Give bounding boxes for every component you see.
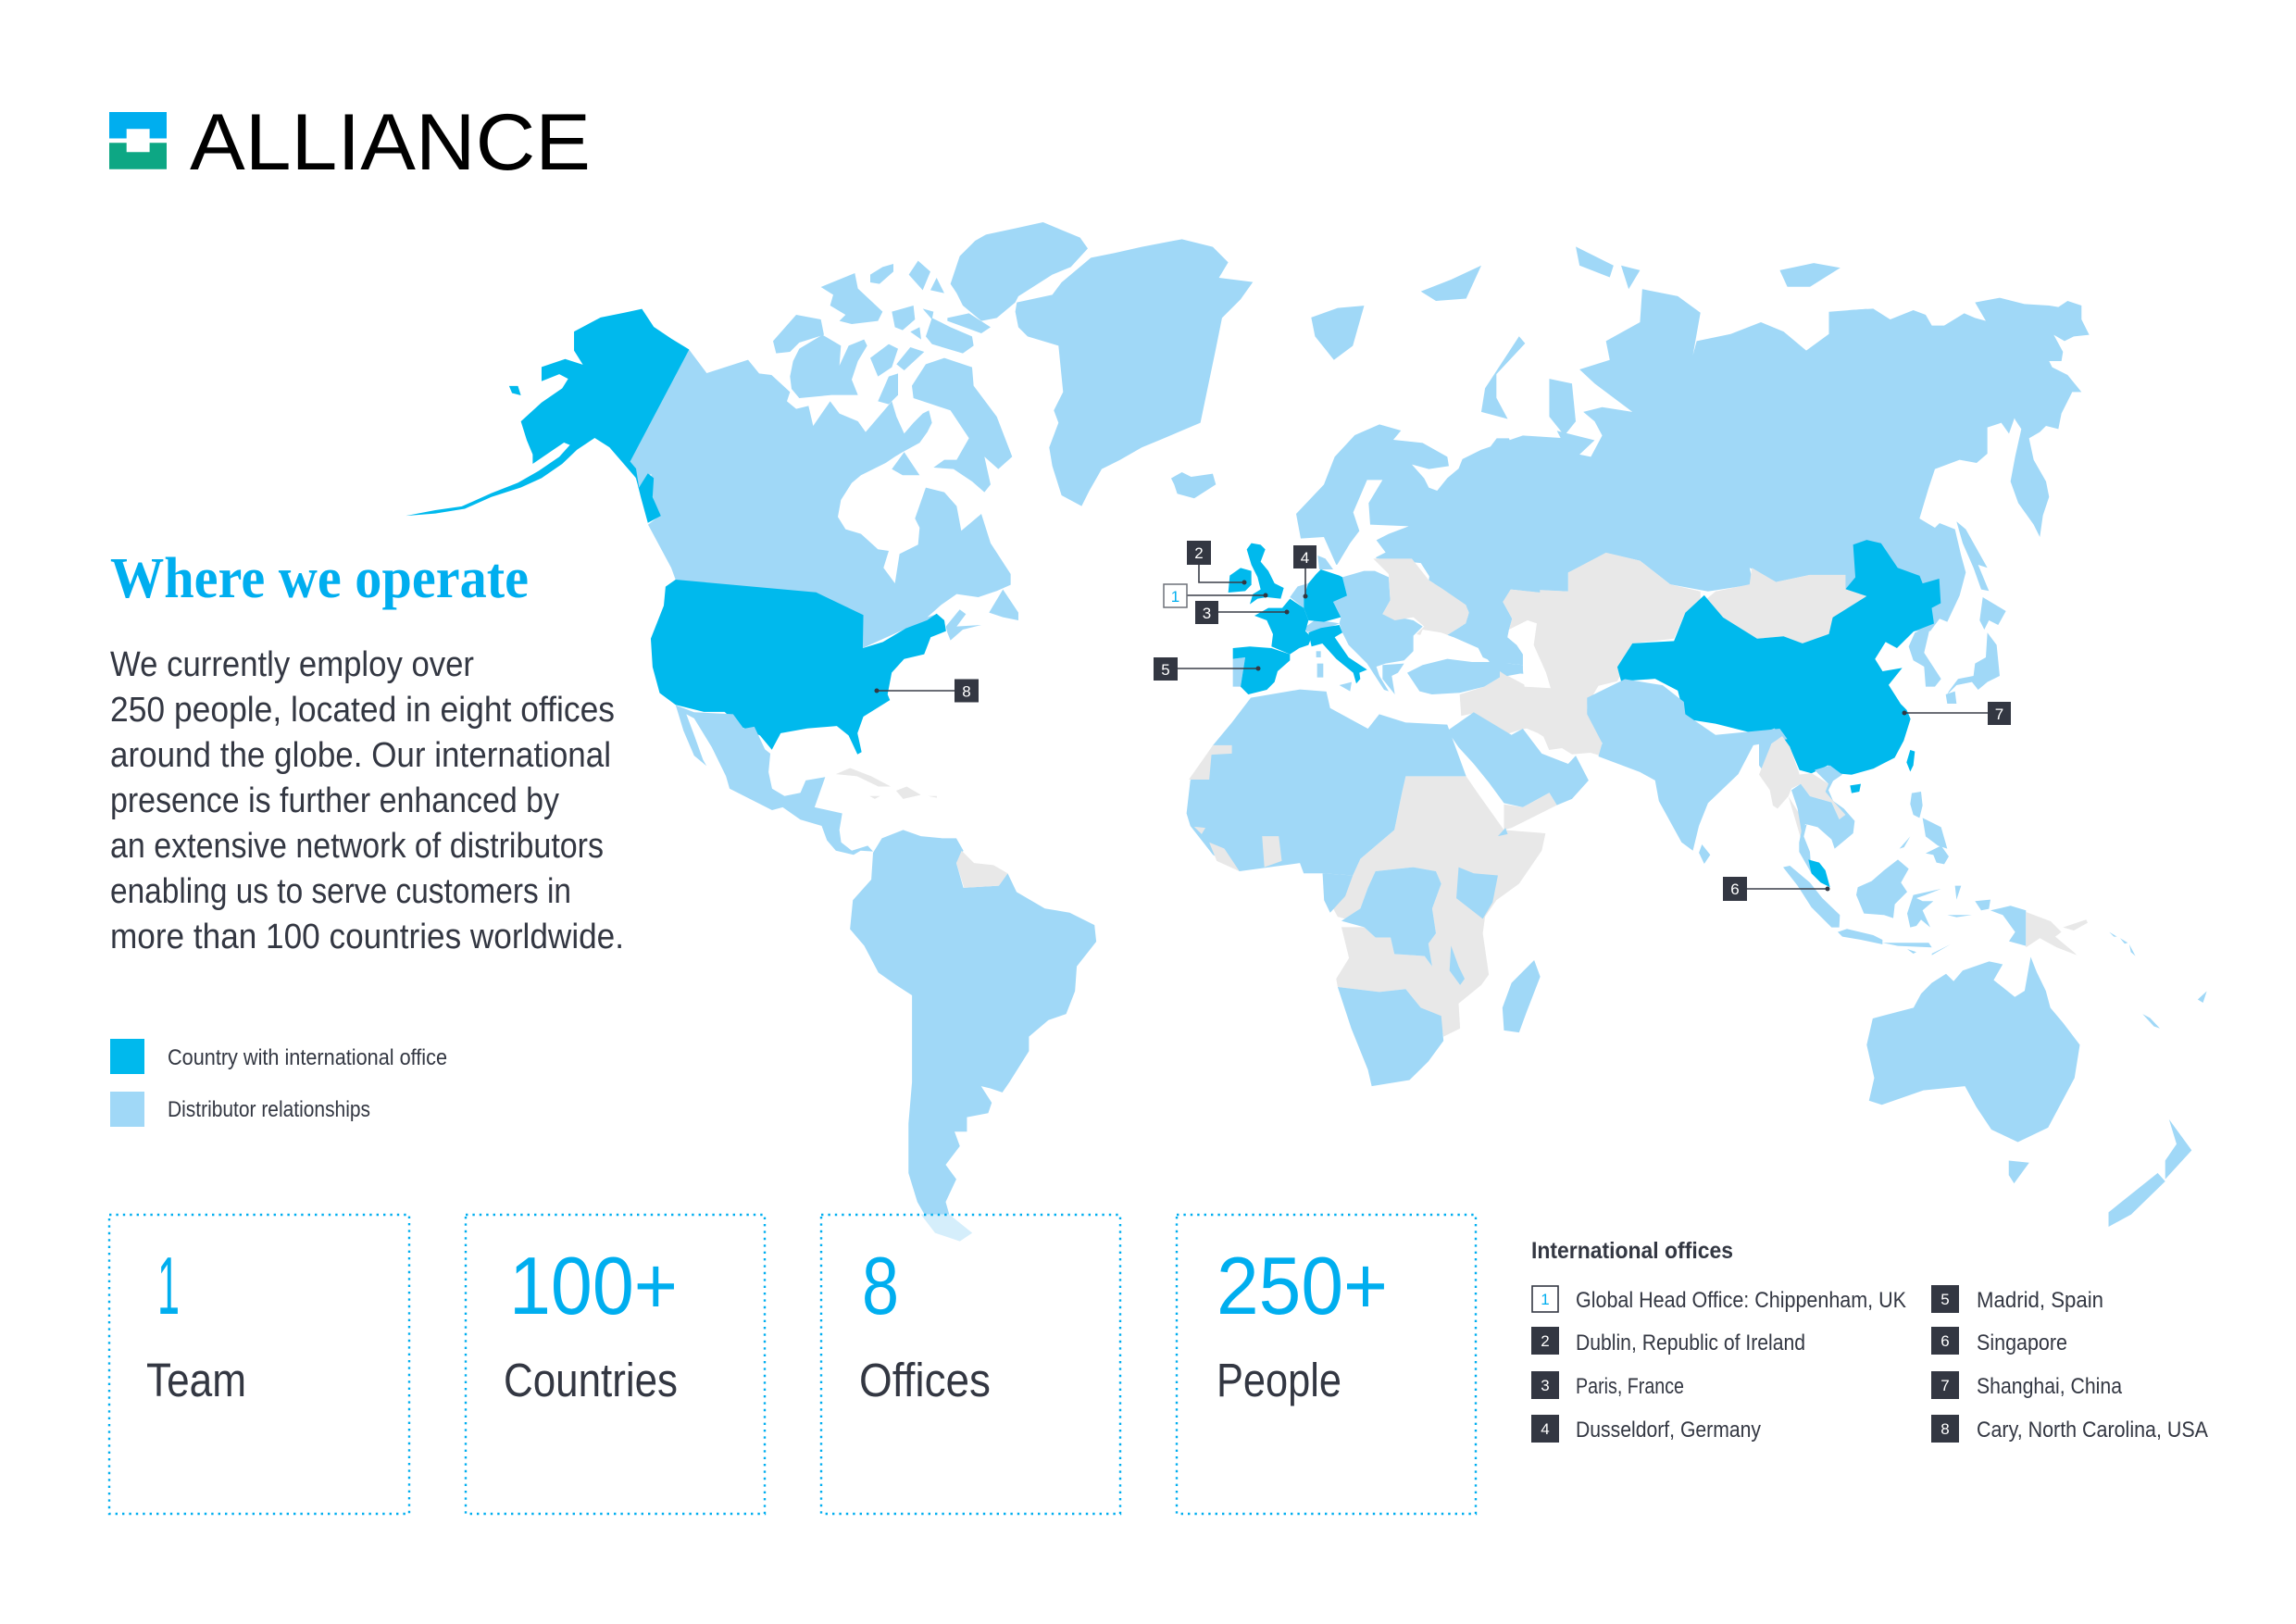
stat panel: 100+ Countries <box>466 1215 765 1514</box>
stat panel: 250+ People: People <box>1217 1354 1341 1406</box>
office rows: 2 <box>1541 1332 1550 1350</box>
office rows: 7 <box>1940 1377 1950 1394</box>
stat panel: 1 Team: 1 <box>157 1240 180 1331</box>
callout 6: Singapore <box>1723 877 1829 901</box>
office rows: 4 <box>1541 1420 1550 1438</box>
office rows: Madrid, Spain <box>1977 1288 2103 1313</box>
stat panel: 250+ People: 250+ <box>1217 1240 1388 1331</box>
map legend <box>110 1039 447 1127</box>
stat panel: 8 Offices: Offices <box>859 1354 991 1406</box>
map: Europe and Near East <box>1229 424 1602 756</box>
callout 1: Chippenham <box>1164 584 1268 607</box>
callout 7: Shanghai: 7 <box>1995 706 2003 723</box>
world map <box>406 222 2207 1242</box>
stat panel: 100+ Countries: Countries <box>504 1354 678 1406</box>
office rows <box>1531 1285 2208 1443</box>
office rows: Dusseldorf, Germany <box>1576 1418 1761 1443</box>
callout 3: Paris <box>1195 601 1289 624</box>
office rows: Shanghai, China <box>1977 1374 2123 1399</box>
office rows: 3 <box>1541 1377 1550 1394</box>
office rows: Dublin, Republic of Ireland <box>1576 1330 1805 1355</box>
callout 3: Paris: 3 <box>1203 605 1211 622</box>
office rows: 5 <box>1940 1291 1950 1308</box>
map: Alaska and USA <box>406 309 946 755</box>
stat panel: 8 Offices: 8 <box>862 1240 899 1331</box>
office rows: 8 <box>1940 1420 1950 1438</box>
map: Africa, Arabia, India and Oceania <box>1187 679 2207 1227</box>
callout 4: Dusseldorf: 4 <box>1301 549 1309 567</box>
office rows: 6 <box>1940 1332 1950 1350</box>
map: Russian Far East <box>1849 298 2090 631</box>
body text: more than 100 countries worldwide. <box>110 918 624 956</box>
stat panel: 100+ Countries: 100+ <box>509 1240 678 1331</box>
body text <box>110 645 624 956</box>
body text: enabling us to serve customers in <box>110 872 571 911</box>
stat panel: 1 Team: Team <box>146 1354 246 1406</box>
stat panel: 1 Team <box>109 1215 409 1514</box>
map legend: Country with international office <box>168 1045 447 1070</box>
body text: around the globe. Our international <box>110 736 611 775</box>
callout 1: Chippenham: 1 <box>1171 588 1179 606</box>
body text: an extensive network of distributors <box>110 827 604 866</box>
body text: We currently employ over <box>110 645 474 684</box>
map: Japan, Korea and Sakhalin <box>1909 521 2006 704</box>
logo mark <box>109 112 167 169</box>
office rows: Cary, North Carolina, USA <box>1977 1418 2208 1443</box>
callout 5: Madrid <box>1154 657 1261 681</box>
office rows: 1 <box>1541 1291 1550 1308</box>
stat panel: 250+ People <box>1177 1215 1476 1514</box>
list heading: International offices <box>1531 1238 1733 1264</box>
callout 2: Dublin: 2 <box>1194 544 1204 562</box>
callout 6: Singapore: 6 <box>1730 881 1740 898</box>
map: Central and South America <box>676 706 1096 1242</box>
callout 4: Dusseldorf <box>1293 545 1316 598</box>
callout 8: Cary <box>874 680 979 702</box>
stat panel: 8 Offices <box>821 1215 1120 1514</box>
office rows: Global Head Office: Chippenham, UK <box>1576 1288 1906 1313</box>
logo: Alliance <box>109 98 591 187</box>
map: Eurasia <box>1311 246 1940 775</box>
map: Canada and Greenland <box>630 222 1253 648</box>
map callouts <box>874 541 2011 901</box>
callout 2: Dublin <box>1187 541 1246 585</box>
callout 7: Shanghai <box>1902 702 2011 725</box>
callout 8: Cary: 8 <box>962 683 971 700</box>
map: South-East Asia <box>1759 729 2136 956</box>
body text: 250 people, located in eight offices <box>110 691 615 730</box>
international offices list <box>1531 1238 2208 1443</box>
office rows: Paris, France <box>1576 1374 1684 1399</box>
map legend: Distributor relationships <box>168 1097 370 1122</box>
heading: Where we operate: Where we operate <box>110 547 529 610</box>
body text: presence is further enhanced by <box>110 781 559 820</box>
callout 5: Madrid: 5 <box>1161 661 1170 679</box>
office rows: Singapore <box>1977 1330 2067 1355</box>
logo wordmark: ALLIANCE <box>190 98 591 187</box>
